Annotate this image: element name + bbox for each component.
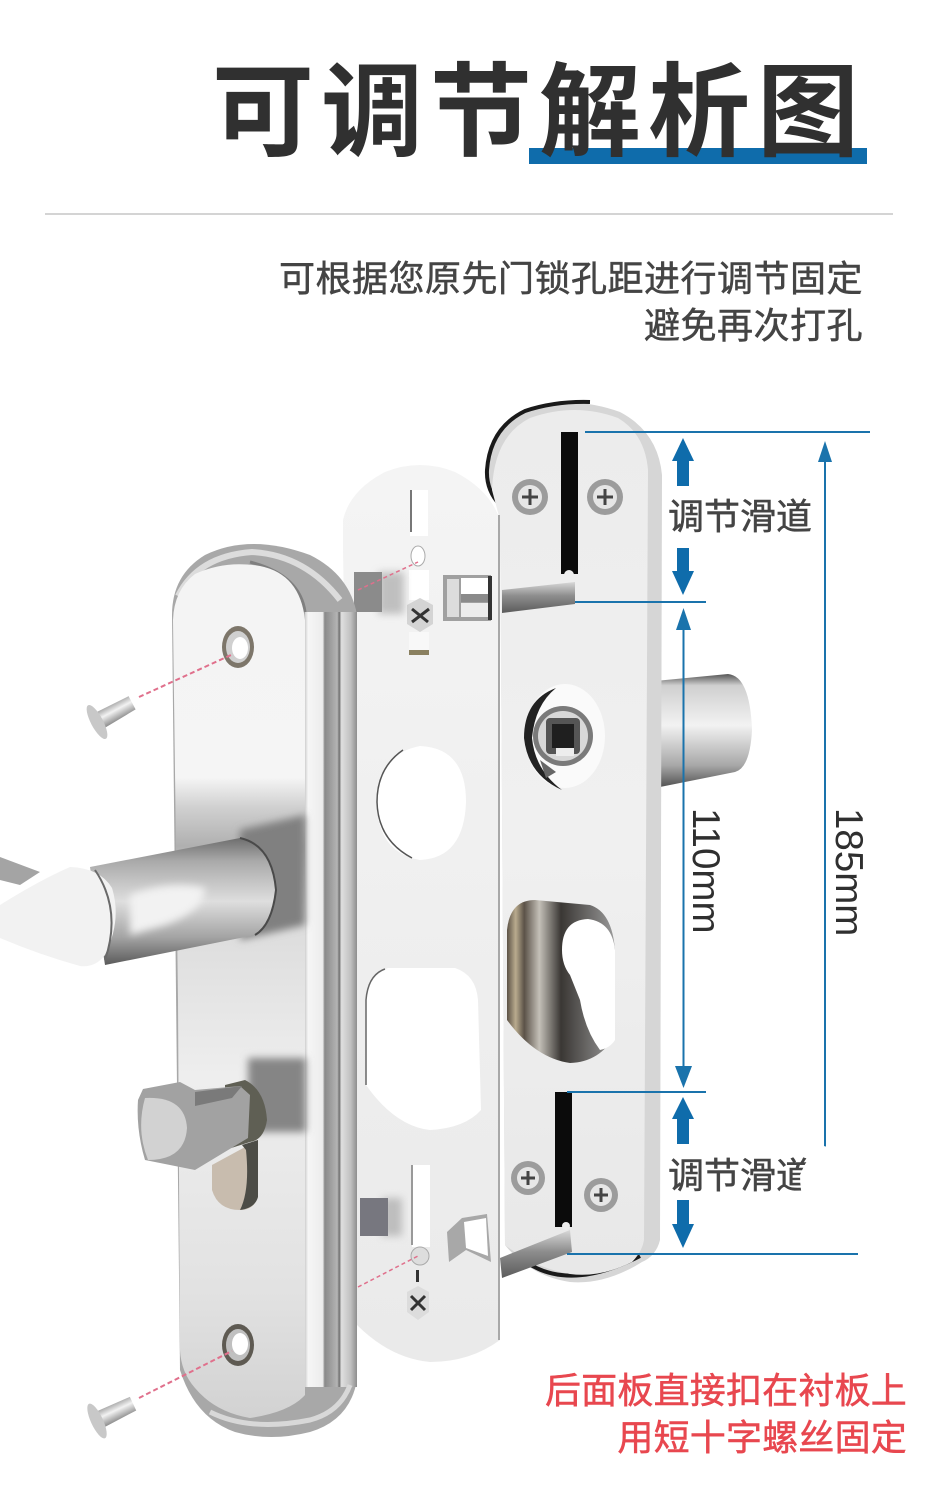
- round lock opening: [377, 746, 466, 860]
- dimension annotations: [567, 432, 870, 1254]
- plate bottom highlight: [210, 1385, 350, 1424]
- spindle cylinder: [655, 674, 752, 788]
- upper adjustment slot: [561, 432, 578, 574]
- lower plate hole: [222, 1324, 254, 1366]
- thumb turn: [138, 1058, 306, 1210]
- lever arm: [0, 857, 40, 885]
- back plate face: [492, 410, 648, 1275]
- handle: [0, 815, 305, 966]
- red note: 后面板直接扣在衬板上: [545, 1370, 907, 1411]
- upper slide arrows: [672, 438, 694, 595]
- upper tab: [354, 572, 404, 614]
- lower notch: [447, 1214, 491, 1262]
- lower screw: [84, 1387, 141, 1441]
- lower slots and screw: [407, 1165, 430, 1320]
- lock illustration: [0, 402, 752, 1441]
- thumb shadow: [248, 1058, 306, 1132]
- cylinder cutout: [507, 900, 615, 1063]
- plate face: [173, 564, 305, 1418]
- rim dark line: [250, 562, 305, 612]
- lower slide label: 调节滑道: [668, 1155, 812, 1196]
- front plate assembly: [0, 544, 357, 1441]
- upper slide label: 调节滑道: [668, 496, 812, 537]
- upper plate hole: [222, 626, 254, 668]
- collar: [225, 1080, 267, 1150]
- description text: 避免再次打孔: [644, 305, 863, 346]
- upper slots and screw: [407, 490, 433, 655]
- plate side bands: [305, 612, 357, 1387]
- knob: [138, 1082, 250, 1170]
- lower slide arrows: [672, 1097, 694, 1248]
- upper assembly guide: [139, 655, 231, 697]
- header divider: [45, 213, 893, 215]
- 185mm label: 185mm: [827, 808, 870, 936]
- lower tab: [360, 1198, 402, 1236]
- handle shadow: [240, 815, 305, 940]
- description text: [279, 258, 863, 346]
- spindle socket: [524, 684, 605, 790]
- back plate dark rim: [487, 402, 640, 1276]
- 110mm label: 110mm: [684, 808, 727, 934]
- handle highlight: [130, 885, 205, 935]
- 110mm dimension arrow: [675, 608, 692, 1088]
- red note: 用短十字螺丝固定: [617, 1417, 907, 1458]
- back plate body: [487, 403, 662, 1282]
- lower adjustment slot: [555, 1092, 572, 1227]
- upper notch: [443, 575, 492, 621]
- description text: 可根据您原先门锁孔距进行调节固定: [279, 258, 863, 299]
- title: 可调节解析图: [212, 56, 866, 170]
- back plate assembly: [487, 402, 752, 1282]
- handle neck: [90, 838, 276, 965]
- handle collar line: [240, 838, 276, 935]
- red note: [545, 1370, 907, 1458]
- key tail: [212, 1140, 258, 1210]
- lower rod: [500, 1222, 572, 1278]
- reference lines: [567, 432, 870, 1254]
- 185mm dimension arrow: [818, 441, 832, 1150]
- upper rod: [502, 570, 575, 613]
- plate screws: [511, 479, 623, 1212]
- middle backing plate: [343, 465, 500, 1362]
- title underline bar: [529, 148, 867, 164]
- lever tip: [0, 867, 116, 966]
- plate outer rim: [172, 544, 357, 1437]
- upper screw: [83, 686, 141, 742]
- retouch patch: [800, 1146, 845, 1225]
- rim highlight: [178, 552, 340, 600]
- red guide upper middle: [358, 562, 418, 590]
- lower assembly guide: [139, 1351, 232, 1398]
- red guide lower middle: [358, 1256, 418, 1287]
- square lock opening: [366, 968, 481, 1130]
